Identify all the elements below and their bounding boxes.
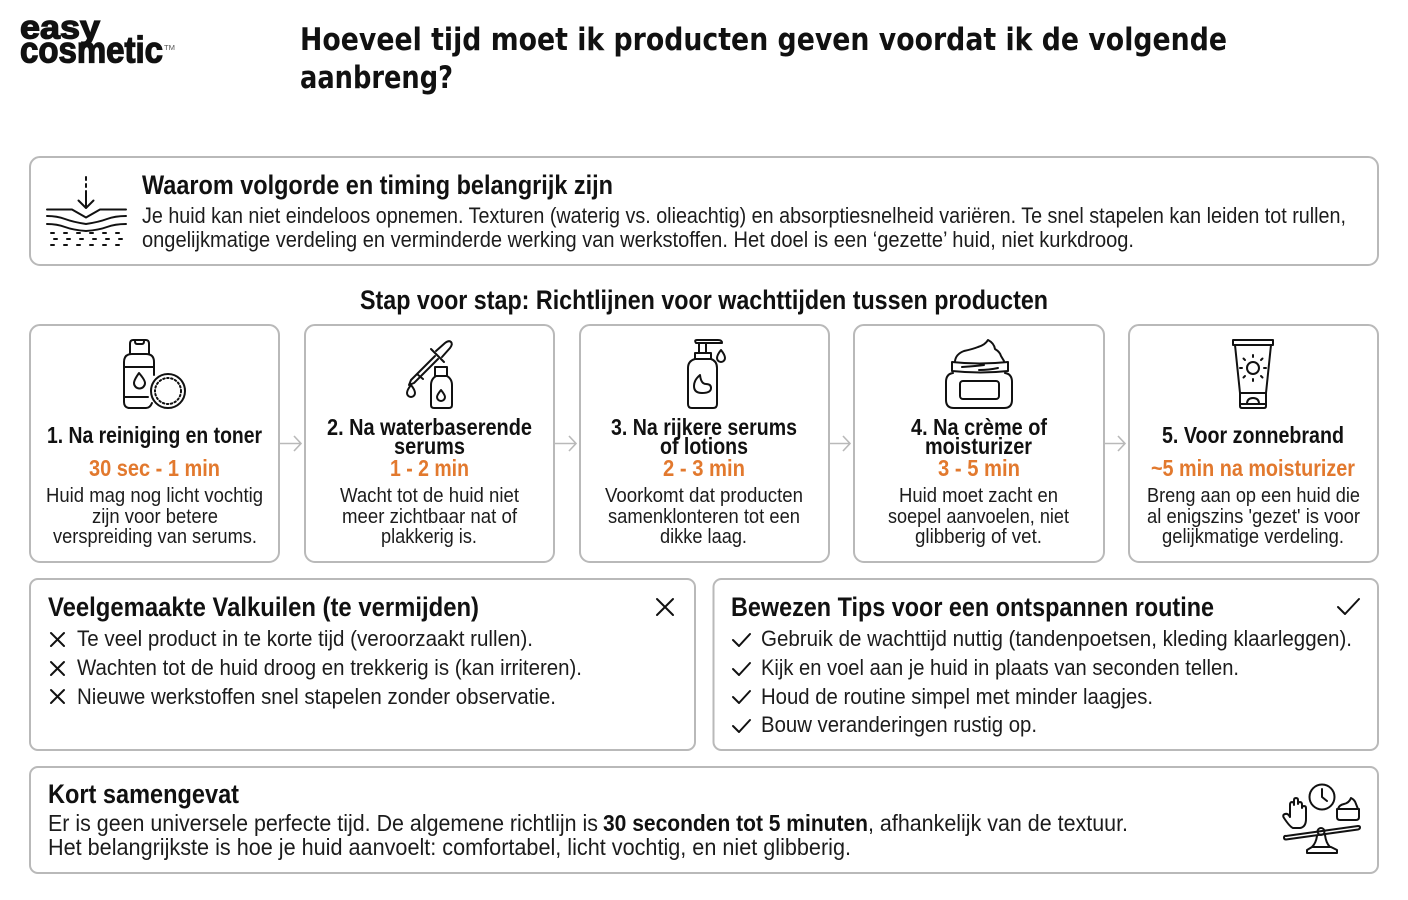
step 2 title (327, 414, 532, 459)
tip 3: Houd de routine simpel met minder laagjes. (761, 684, 1153, 709)
icon: large check (1338, 599, 1359, 614)
panel: step 2 (305, 325, 554, 562)
step 2 description (340, 484, 519, 548)
panel: why order and timing matter (30, 157, 1378, 265)
step 2 description: Wacht tot de huid niet (340, 484, 519, 507)
panel: step 3 (580, 325, 829, 562)
step 1 title: 1. Na reiniging en toner (47, 422, 262, 448)
step 4 title (911, 414, 1047, 459)
heading: step by step: Stap voor stap: Richtlijnen voor wachttijden tussen producten (360, 285, 1048, 315)
step 1 time: 30 sec - 1 min (89, 455, 220, 481)
step 3 title (611, 414, 797, 459)
logo (20, 8, 175, 70)
step 3 description (605, 484, 803, 548)
heading: why: Waarom volgorde en timing belangrijk zijn (142, 170, 613, 200)
text block: summary: Er is geen universele perfecte tijd. De algemene richtlijn is (48, 810, 598, 836)
icon: balance with hand, clock and cream (1283, 784, 1360, 853)
step 4 description: Huid moet zacht en (899, 484, 1058, 507)
step 2 title: serums (394, 433, 465, 459)
icon: absorption into skin layers (47, 177, 126, 245)
step 3 title: of lotions (660, 433, 748, 459)
panel: step 1 (30, 325, 279, 562)
heading: tips: Bewezen Tips voor een ontspannen routine (731, 592, 1214, 622)
step 5 time: ~5 min na moisturizer (1151, 455, 1355, 481)
text block: why: ongelijkmatige verdeling en verminderde werking van werkstoffen. Het doel is een ‘gezette’ huid, niet kurkdroog. (142, 227, 1134, 252)
step 3 time: 2 - 3 min (663, 455, 745, 481)
text block: summary: Het belangrijkste is hoe je huid aanvoelt: comfortabel, licht vochtig, en niet glibberig. (48, 834, 851, 860)
step 3 description: Voorkomt dat producten (605, 484, 803, 507)
heading: pitfalls: Veelgemaakte Valkuilen (te vermijden) (48, 592, 479, 622)
icon: dropper and serum bottle (407, 341, 452, 408)
text block: why (142, 203, 1346, 252)
tip 1: Gebruik de wachttijd nuttig (tandenpoetsen, kleding klaarleggen). (761, 626, 1352, 651)
step 3 description: dikke laag. (660, 525, 747, 548)
arrow: step 2 to 3 (555, 436, 576, 451)
step 3 description: samenklonteren tot een (608, 505, 800, 528)
panel: proven tips (714, 579, 1378, 750)
step 5 description: gelijkmatige verdeling. (1162, 525, 1344, 548)
step 2 description: meer zichtbaar nat of (342, 505, 517, 528)
step 1 description: Huid mag nog licht vochtig (46, 484, 263, 507)
text block: summary (48, 810, 1128, 860)
panel: summary (30, 767, 1378, 873)
logo: easy (20, 8, 101, 46)
title: Hoeveel tijd moet ik producten geven voordat ik de volgende (300, 22, 1227, 58)
step 5 title: 5. Voor zonnebrand (1162, 422, 1344, 448)
step 5 description: Breng aan op een huid die (1147, 484, 1360, 507)
text block: summary: , afhankelijk van de textuur. (868, 810, 1128, 836)
panel: step 5 (1129, 325, 1378, 562)
step 1 description: verspreiding van serums. (53, 525, 257, 548)
logo: TM (164, 45, 175, 52)
icon: toner bottle and cotton pad (124, 340, 185, 408)
step 4 description: soepel aanvoelen, niet (888, 505, 1069, 528)
step 5 description (1147, 484, 1360, 548)
step 4 title: moisturizer (925, 433, 1032, 459)
icon: cream jar (946, 340, 1012, 408)
step 4 title: 4. Na crème of (911, 414, 1047, 440)
panel: common pitfalls (30, 579, 695, 750)
step 5 description: al enigszins 'gezet' is voor (1147, 505, 1360, 528)
step 4 description (888, 484, 1069, 548)
arrow: step 4 to 5 (1105, 436, 1125, 451)
title (300, 22, 1227, 96)
title: aanbreng? (300, 60, 453, 96)
heading: summary: Kort samengevat (48, 779, 239, 809)
step 1 description: zijn voor betere (92, 505, 218, 528)
step 4 description: glibberig of vet. (915, 525, 1042, 548)
pitfall 3: Nieuwe werkstoffen snel stapelen zonder observatie. (77, 684, 556, 709)
pitfall 1: Te veel product in te korte tijd (veroorzaakt rullen). (77, 626, 533, 651)
step 2 title: 2. Na waterbaserende (327, 414, 532, 440)
pitfall 2: Wachten tot de huid droog en trekkerig is (kan irriteren). (77, 655, 582, 680)
step 1 description (46, 484, 263, 548)
tip 2: Kijk en voel aan je huid in plaats van seconden tellen. (761, 655, 1239, 680)
icon: sunscreen tube (1233, 340, 1273, 408)
text block: summary: 30 seconden tot 5 minuten (603, 810, 868, 836)
step 3 title: 3. Na rijkere serums (611, 414, 797, 440)
arrow: step 1 to 2 (280, 436, 301, 451)
logo: cosmetic (20, 30, 163, 70)
step 2 time: 1 - 2 min (390, 455, 469, 481)
arrow: step 3 to 4 (830, 436, 850, 451)
panel: step 4 (854, 325, 1104, 562)
tip 4: Bouw veranderingen rustig op. (761, 712, 1037, 737)
icon: pump bottle (688, 340, 725, 408)
step 2 description: plakkerig is. (381, 525, 477, 548)
step 4 time: 3 - 5 min (938, 455, 1020, 481)
icon: large cross (657, 599, 673, 615)
